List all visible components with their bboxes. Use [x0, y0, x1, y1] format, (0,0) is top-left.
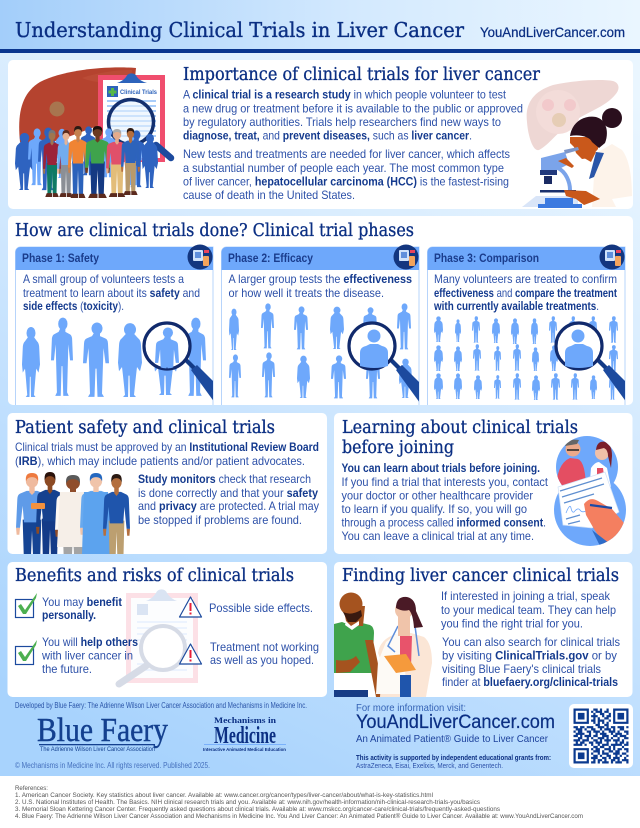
text block: informed consent: through a process called informed consent. — [342, 516, 546, 530]
text block: search: finder at bluefaery.org/clinical-trials — [442, 675, 618, 689]
footer: more information — [356, 702, 555, 770]
text block: search: visiting Blue Faery's clinical trials — [442, 662, 601, 676]
text block: need: of liver cancer, hepatocellular carcinoma (HCC) is the fastest-rising — [183, 174, 509, 188]
card: phase 3 — [428, 244, 639, 405]
text block: IRB: (IRB), which may include patients and/or patient advocates. — [15, 454, 305, 468]
text block: need — [183, 147, 510, 202]
text block: definition: A clinical trial is a research study in which people volunteer to test — [183, 88, 507, 102]
website link: YouAndLiverCancer.com — [480, 25, 625, 40]
text block: study monitors — [138, 472, 319, 527]
references — [15, 785, 583, 820]
volunteers and magnifier — [229, 303, 432, 403]
text: treatment not working: as well as you hoped. — [210, 653, 314, 667]
illustration: scientist at microscope — [522, 80, 632, 208]
title: Understanding Clinical Trials in Liver Cancer — [15, 18, 464, 42]
header band — [0, 0, 640, 53]
text block: need: a substantial number of people each year. The most common type — [183, 161, 504, 175]
text block: informed consent: You can learn about trials before joining. — [342, 461, 540, 475]
QR code — [569, 704, 633, 768]
footer: more information: For more information visit: — [356, 702, 466, 714]
illustration: patient signing consent — [554, 436, 626, 550]
heading: Benefits and risks of clinical trials — [15, 566, 294, 586]
volunteers and magnifier — [434, 316, 639, 403]
panel: learning before joining — [334, 413, 632, 554]
logo: Blue Faery: The Adrienne Wilson Liver Cancer Association — [40, 746, 155, 753]
text block: IRB: Clinical trials must be approved by an Institutional Review Board — [15, 440, 319, 454]
logo: Mechanisms in Medicine — [203, 715, 286, 753]
logo: Mechanisms in Medicine: Interactive Animated Medical Education — [203, 747, 286, 753]
text: help others: the future. — [42, 662, 92, 676]
copyright: © Mechanisms in Medicine Inc. All rights reserved. Published 2025. — [15, 761, 210, 770]
text block: speak to team — [441, 589, 616, 630]
illustration: healthcare team — [16, 472, 130, 554]
footer: more information: An Animated Patient® Guide to Liver Cancer — [356, 733, 548, 745]
text block: search — [442, 635, 620, 689]
heading: Patient safety and clinical trials — [15, 418, 275, 438]
panel: clinical trial phases — [8, 216, 639, 405]
phase 1 text — [23, 272, 200, 313]
footer: developers and logos: Developed by Blue Faery: The Adrienne Wilson Liver Cancer Association and Mechanisms in Medicine Inc. — [15, 701, 307, 710]
icon: warning 2 — [180, 644, 202, 664]
text: benefit personally: You may benefit — [42, 595, 122, 609]
icon: checkbox 2 — [16, 640, 37, 664]
logo: Mechanisms in Medicine: Medicine — [214, 723, 276, 749]
text block: definition: a new drug or treatment before it is available to the public or approved — [183, 102, 523, 116]
text block: informed consent: You can leave a clinical trial at any time. — [342, 529, 534, 543]
text block: definition: diagnose, treat, and prevent diseases, such as liver cancer. — [183, 128, 472, 142]
text block: search: by visiting ClinicalTrials.gov or by — [442, 648, 617, 662]
panel: finding trials — [334, 562, 632, 697]
text: help others: You will help others — [42, 635, 138, 649]
phase 1 text: side effects (toxicity). — [23, 299, 124, 313]
illustration: patient and doctor — [334, 592, 432, 697]
icon: IV bag and pills — [394, 244, 418, 270]
phase 3 text — [433, 272, 617, 313]
footer: more information: YouAndLiverCancer.com — [356, 712, 555, 733]
heading: How are clinical trials done? Clinical trial phases — [15, 221, 414, 241]
heading — [342, 418, 578, 458]
phase 2 text: A larger group tests the effectiveness — [228, 272, 412, 286]
references: References: — [15, 785, 48, 792]
footer: more information: This activity is supported by independent educational grants from: — [356, 753, 551, 762]
icon: IV bag and pills — [600, 244, 624, 270]
card: phase 2 — [222, 244, 432, 405]
references: 1. American Cancer Society. Key statistics about liver cancer. Available at: www.cancer.org/cancer/types/liver-cancer/about/what-is-key-statistics.html — [15, 792, 433, 799]
text block: study monitors: and privacy are protected. A trial may — [138, 499, 319, 513]
text block: informed consent: If you find a trial that interests you, contact — [342, 475, 549, 489]
text block: informed consent: your doctor or other healthcare provider — [342, 488, 533, 502]
phase 1 title: Phase 1: Safety — [22, 251, 99, 265]
phase 3 text: effectiveness and compare the treatment — [434, 286, 617, 300]
panel: patient safety — [8, 413, 327, 570]
text block: need: New tests and treatments are needed for liver cancer, which affects — [183, 147, 510, 161]
logo: Mechanisms in Medicine: Mechanisms in — [214, 715, 276, 725]
text: side effects: Possible side effects. — [209, 601, 313, 615]
text block: study monitors: be stopped if problems are found. — [138, 513, 302, 527]
watermark: clipboard and magnifier — [119, 589, 198, 684]
text block: definition — [183, 88, 523, 142]
text block: study monitors: is done correctly and that your safety — [138, 486, 318, 500]
icon: warning 1 — [180, 597, 202, 617]
illustration: liver, clipboard and crowd — [15, 67, 171, 198]
references: 4. Blue Faery: The Adrienne Wilson Liver Cancer Association and Mechanisms in Medicine Inc. You And Liver Cancer: An Animated Patient® Guide to Liver Cancer. Available at: www.YouAndLiverCancer.com — [15, 812, 583, 820]
text block: speak to team: you find the right trial for you. — [441, 616, 583, 630]
logo: Blue Faery: Blue Faery — [37, 712, 168, 749]
text: benefit personally: personally. — [42, 608, 96, 622]
text block: study monitors: Study monitors check that research — [138, 472, 311, 486]
text: help others — [41, 635, 138, 676]
text block: IRB — [15, 440, 319, 468]
text: help others: with liver cancer in — [41, 648, 133, 662]
heading: Learning about clinical trials — [342, 418, 578, 438]
card: phase 1 — [16, 244, 227, 405]
panel: importance of clinical trials — [8, 60, 633, 209]
text block: informed consent: to learn if you qualify. If so, you will go — [342, 502, 527, 516]
icon: checkbox 1 — [16, 593, 37, 618]
volunteers and magnifier — [22, 318, 227, 403]
phase 2 text: or how well it treats the disease. — [228, 286, 384, 300]
phase 2 text — [228, 272, 412, 300]
illustration: liver, clipboard and crowd: Clinical Trials — [120, 90, 158, 96]
footer: more information: AstraZeneca, Eisai, Exelixis, Merck, and Genentech. — [356, 761, 503, 770]
panel: benefits and risks — [8, 562, 327, 697]
footer: developers and logos — [15, 701, 307, 770]
phase 3 text: Many volunteers are treated to confirm — [434, 272, 617, 286]
phase 1 text: treatment to learn about its safety and — [23, 286, 200, 300]
references: 2. U.S. National Institutes of Health. The Basics. NIH clinical research trials and you. Available at: www.nih.gov/health-information/nih-clinical-research-trials-you/basics — [15, 799, 481, 806]
text block: need: cause of death in the United States. — [183, 188, 355, 202]
phase 2 title: Phase 2: Efficacy — [228, 251, 313, 265]
text block: speak to team: If interested in joining a trial, speak — [441, 589, 610, 603]
heading: before joining — [342, 438, 454, 458]
text block: informed consent — [342, 461, 549, 543]
phase 1 text: A small group of volunteers tests a — [23, 272, 184, 286]
phase 3 title: Phase 3: Comparison — [434, 251, 539, 265]
text: treatment not working — [210, 640, 319, 667]
heading: Finding liver cancer clinical trials — [342, 566, 619, 586]
text: treatment not working: Treatment not working — [210, 640, 319, 654]
text block: speak to team: to your medical team. They can help — [441, 603, 616, 617]
references: 3. Memorial Sloan Kettering Cancer Center. Frequently asked questions about clinical trials. Available at: www.mskcc.org/cancer-care/clinical-trials/frequently-asked-questions — [15, 806, 501, 813]
icon: IV bag and pills — [188, 244, 212, 270]
text block: search: You can also search for clinical trials — [442, 635, 620, 649]
heading: Importance of clinical trials for liver cancer — [183, 65, 541, 85]
text: benefit personally — [42, 595, 122, 622]
text block: definition: by regulatory authorities. Trials help researchers find new ways to — [183, 115, 501, 129]
phase 3 text: with currently available treatments. — [433, 299, 599, 313]
